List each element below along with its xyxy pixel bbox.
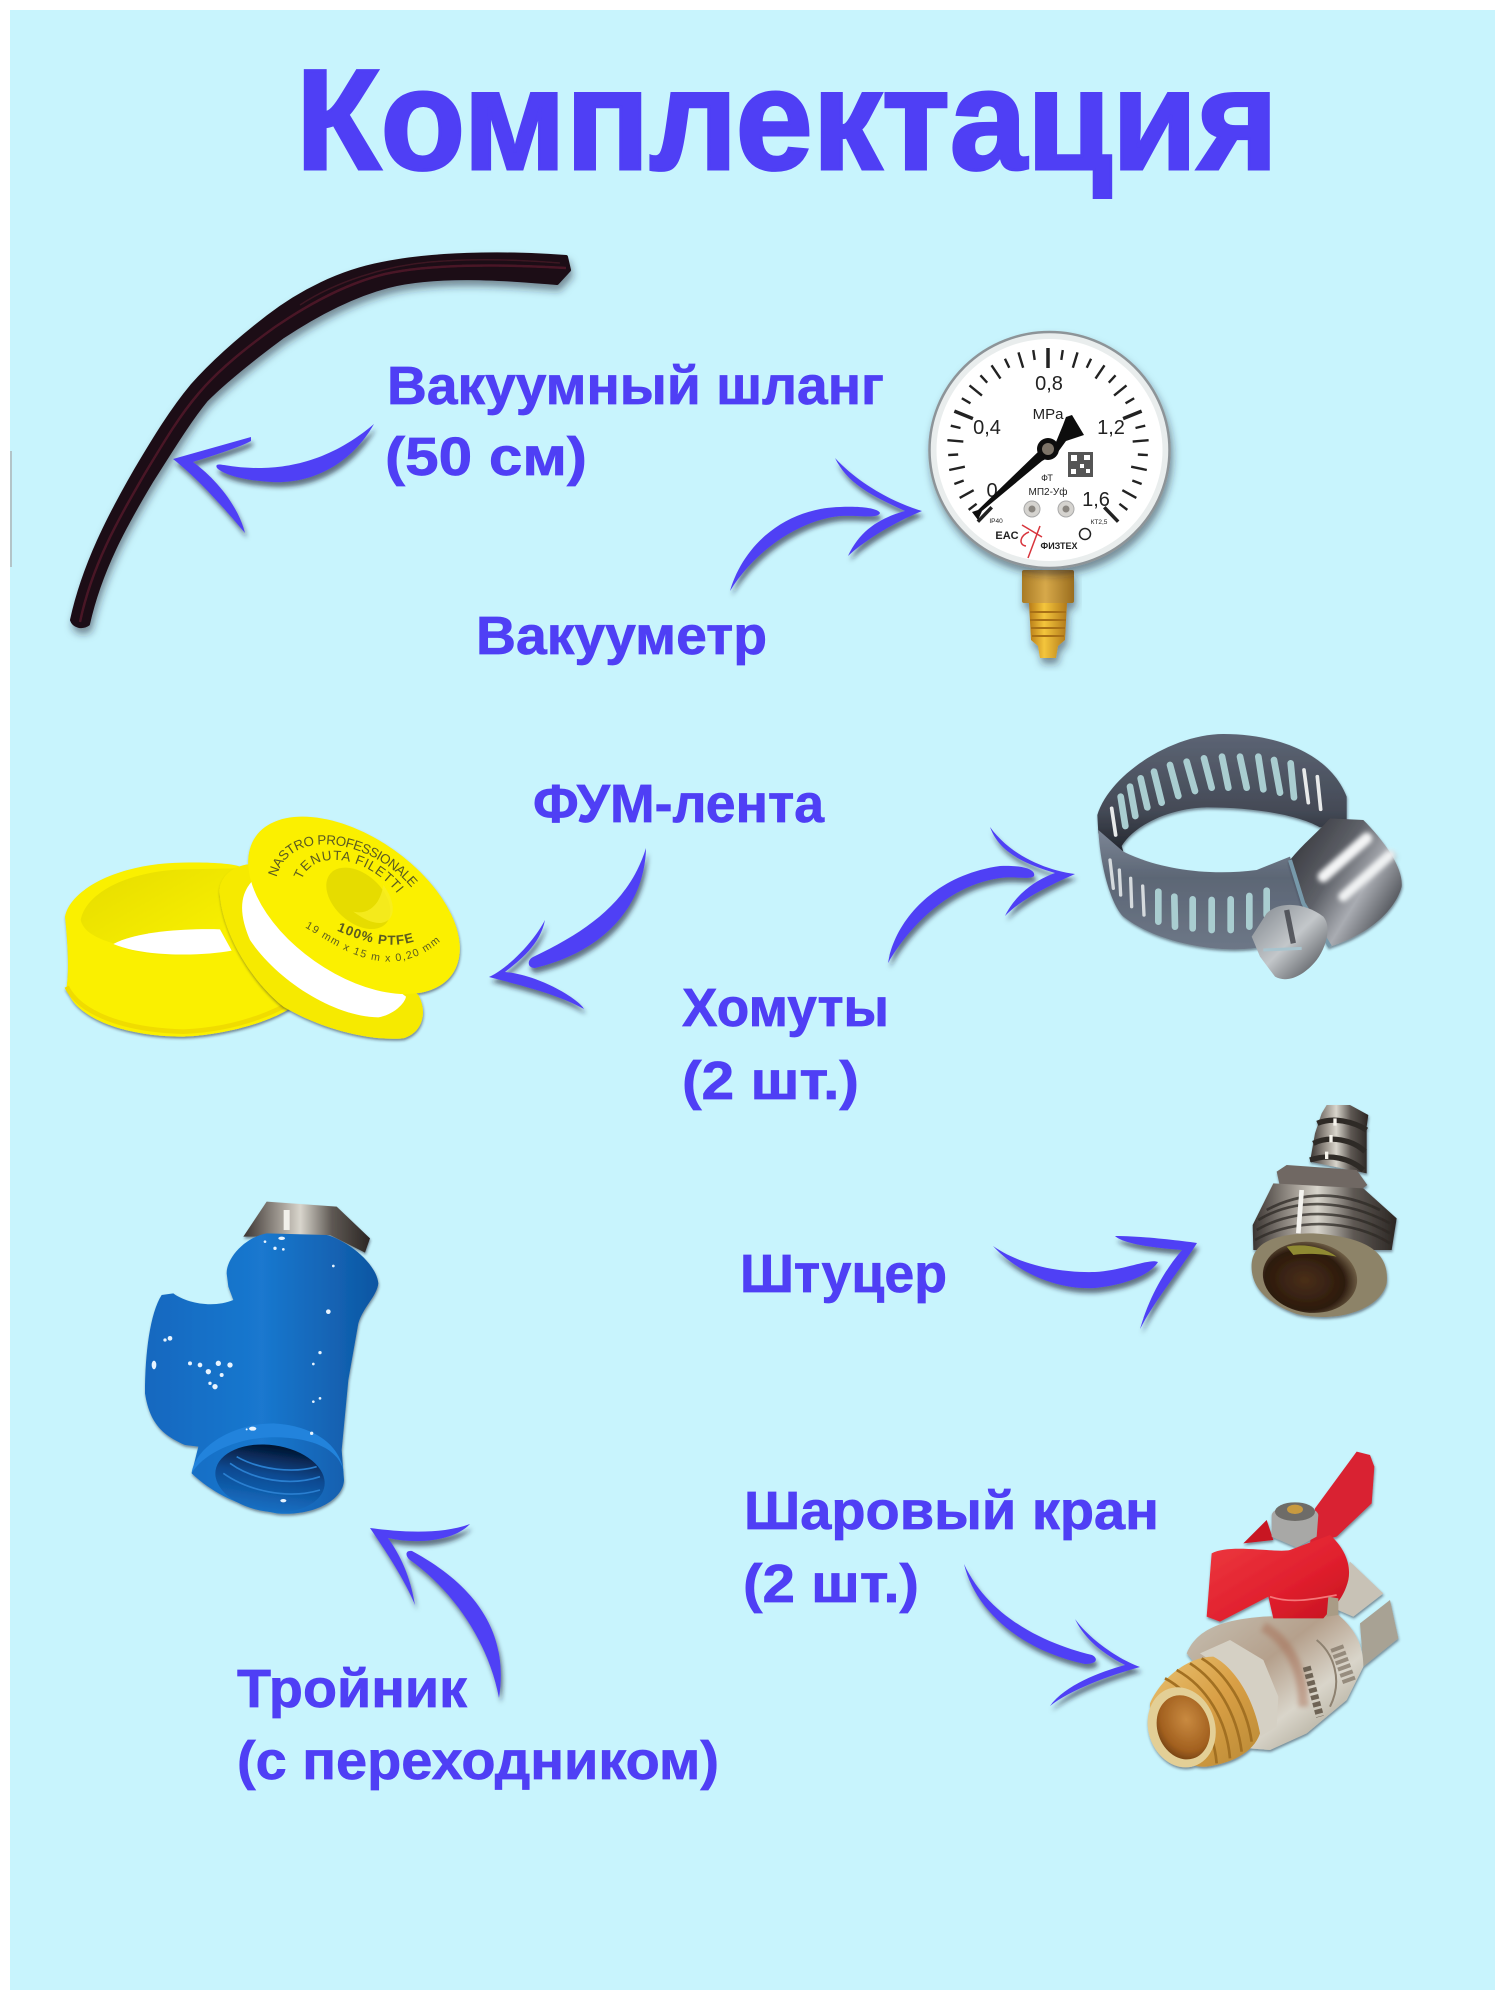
clamp screw <box>1252 905 1328 979</box>
gauge scale labels: 0,8 <box>1035 373 1063 395</box>
tee bottom collar <box>192 1423 344 1473</box>
label: fitting: Штуцер <box>740 1244 947 1304</box>
gauge needle <box>972 415 1084 520</box>
gauge scale labels: МП2-Уф <box>1028 486 1068 498</box>
gauge screws and logo <box>1021 501 1090 558</box>
arrow: to valve <box>964 1564 1140 1706</box>
label: vacuum gauge: Вакууметр <box>476 606 767 666</box>
tee bore <box>211 1438 329 1519</box>
gauge scale labels: ФИЗТЕХ <box>1041 541 1077 551</box>
gauge scale labels: 1,2 <box>1097 417 1125 439</box>
gauge scale labels <box>973 373 1125 551</box>
tee highlights <box>152 1237 335 1502</box>
tee body <box>145 1233 378 1514</box>
arrow: to gauge <box>730 458 922 591</box>
clamp band <box>1097 734 1347 949</box>
fitting hex <box>1277 1165 1367 1192</box>
tape printed text: 100% PTFE <box>337 923 414 945</box>
icon: vacuum gauge <box>930 332 1170 658</box>
gauge scale labels: MPa <box>1033 406 1064 423</box>
label: ball valve <box>743 1481 1159 1614</box>
label: ball valve: (2 шт.) <box>743 1554 919 1614</box>
title: Комплектация <box>296 41 1278 200</box>
tape printed text: NASTRO PROFESSIONALE <box>268 835 418 888</box>
arrow: to tee <box>370 1524 501 1698</box>
label: tee: (с переходником) <box>237 1731 719 1791</box>
gauge dial <box>930 332 1170 568</box>
tape outer ring <box>65 863 290 1037</box>
label: clamps: (2 шт.) <box>682 1051 859 1111</box>
label: vacuum hose: (50 см) <box>385 427 587 487</box>
icon: PTFE tape <box>64 816 462 1042</box>
gauge QR code <box>1068 452 1093 477</box>
tape printed text: 19 mm x 15 m x 0,20 mm <box>306 922 440 962</box>
arrow: to hose <box>173 424 374 533</box>
valve red handle <box>1207 1452 1374 1622</box>
label: vacuum hose: Вакуумный шланг <box>387 356 884 416</box>
valve rear body <box>1330 1562 1398 1667</box>
fitting thread <box>1253 1183 1397 1250</box>
icon: hose fitting <box>1252 1105 1397 1319</box>
arrow: to clamp <box>888 827 1075 963</box>
gauge scale labels: КТ2,5 <box>1091 519 1108 526</box>
label: tee <box>237 1659 719 1791</box>
icon: vacuum hose <box>72 254 569 626</box>
label: PTFE tape: ФУМ-лента <box>533 774 825 834</box>
fitting barb <box>1310 1105 1368 1173</box>
gauge scale labels: ФТ <box>1041 473 1053 483</box>
label: clamps <box>682 978 889 1111</box>
tee adapter nut <box>243 1202 370 1253</box>
valve handle nut <box>1272 1502 1318 1547</box>
tape printed text <box>268 835 440 962</box>
valve opening <box>1137 1678 1226 1776</box>
icon: hose clamp <box>1097 734 1402 979</box>
label: ball valve: Шаровый кран <box>744 1481 1159 1541</box>
arrow: to tape <box>489 848 646 1009</box>
valve brass thread <box>1150 1657 1260 1767</box>
gauge brass fitting <box>1022 570 1074 658</box>
label: tee: Тройник <box>237 1659 468 1719</box>
gauge scale labels: EAC <box>995 530 1019 542</box>
icon: ball valve <box>1137 1452 1398 1776</box>
tape spool <box>217 781 491 1039</box>
fitting opening <box>1252 1233 1387 1319</box>
gauge ticks <box>947 348 1149 522</box>
clamp slots <box>1110 757 1321 930</box>
clamp housing <box>1290 818 1402 947</box>
gauge scale labels: 1,6 <box>1082 489 1110 511</box>
label: vacuum hose <box>385 356 884 487</box>
tape printed text: TENUTA FILETTI <box>293 850 404 893</box>
label: clamps: Хомуты <box>682 978 889 1038</box>
icon: blue tee <box>145 1202 378 1519</box>
gauge scale labels: 0,4 <box>973 417 1001 439</box>
gauge scale labels: IP40 <box>989 518 1003 525</box>
arrow: to fitting <box>993 1236 1197 1329</box>
valve main body <box>1187 1613 1363 1750</box>
gauge scale labels: 0 <box>986 480 998 502</box>
